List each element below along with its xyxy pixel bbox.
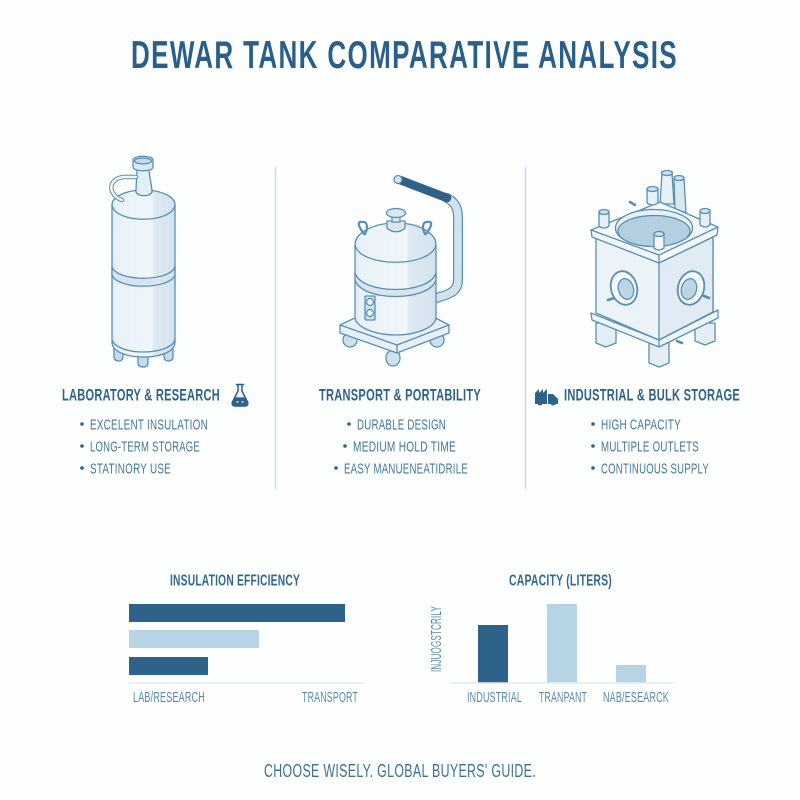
footer tagline: CHOOSE WISELY. GLOBAL BUYERS' GUIDE. <box>264 761 536 781</box>
bullet list: industrial <box>591 416 709 478</box>
axis label: industrial: INDUSTRIAL <box>467 690 522 706</box>
y axis label: INJUOGSTCRILY <box>429 606 445 672</box>
bar: industrial <box>478 625 508 683</box>
panel: transport and portability <box>319 176 481 478</box>
panel: industrial and bulk storage <box>535 170 740 478</box>
bullet list: laboratory: LONG-TERM STORAGE <box>90 438 200 456</box>
bullet list: transport: MEDIUM HOLD TIME <box>353 438 456 456</box>
axis label: transport: TRANSPORT <box>302 690 358 706</box>
bullet list: industrial: CONTINUOUS SUPPLY <box>601 460 709 478</box>
axis label: transport: TRANPANT <box>539 690 587 706</box>
bar: middle <box>129 630 259 648</box>
heading: laboratory and research: LABORATORY & RESEARCH <box>62 386 220 404</box>
chart: capacity <box>429 572 674 706</box>
bullet list: laboratory: EXCELENT INSULATION <box>90 416 208 434</box>
bullet list: transport <box>334 416 468 478</box>
bullet list: laboratory: STATINORY USE <box>90 460 171 478</box>
bullet list: transport: EASY MANUENEATIDRILE <box>344 460 468 478</box>
bullet list: industrial: MULTIPLE OUTLETS <box>601 438 699 456</box>
bullet list: industrial: HIGH CAPACITY <box>601 416 681 434</box>
bar: bottom <box>129 657 208 675</box>
panel: laboratory and research <box>62 156 248 478</box>
icon: truck <box>535 389 558 406</box>
chart: insulation efficiency <box>129 572 364 706</box>
axis label: lab/research: LAB/RESEARCH <box>133 690 205 706</box>
illustration: tall laboratory dewar <box>111 156 175 367</box>
bar: lab/research <box>616 665 646 683</box>
bullet list: laboratory <box>80 416 208 478</box>
bar: transport <box>547 604 577 683</box>
chart title: CAPACITY (LITERS) <box>509 572 612 590</box>
chart title: INSULATION EFFICIENCY <box>170 572 300 590</box>
bar: top <box>129 604 345 622</box>
axis label: lab/research: NAB/ESEARCK <box>603 690 669 706</box>
illustration: square bulk storage tank <box>591 170 718 367</box>
heading: transport and portability: TRANSPORT & PORTABILITY <box>319 386 481 404</box>
icon: flask <box>232 384 248 406</box>
bullet list: transport: DURABLE DESIGN <box>357 416 446 434</box>
illustration: wheeled portable dewar <box>340 176 458 366</box>
